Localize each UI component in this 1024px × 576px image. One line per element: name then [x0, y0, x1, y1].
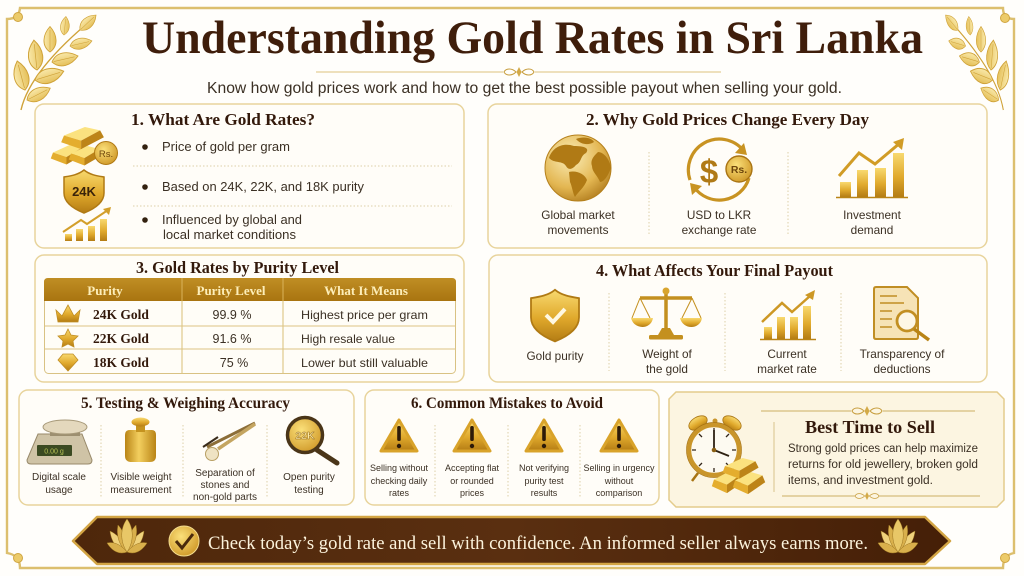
icon: 22K magnifier: 22K: [295, 430, 315, 442]
label: separation: stones and: [201, 480, 249, 491]
table header: Purity Level: [197, 283, 266, 298]
label: separation: Separation of: [195, 468, 255, 479]
banner: [73, 517, 950, 564]
label: exchange rate: exchange rate: [682, 223, 757, 237]
icon: left lotus: [107, 519, 147, 553]
label: open purity: Open purity: [283, 472, 335, 483]
title ornament: [316, 67, 721, 77]
row: 24K: 99.9 %: [213, 308, 251, 322]
label: separation: [193, 468, 257, 503]
icon: balance scale: [631, 288, 702, 340]
label: current rate: [757, 347, 817, 376]
label: mistake 2: or rounded: [450, 476, 494, 486]
label: gold purity: Gold purity: [526, 349, 584, 363]
label: transparency: deductions: [873, 362, 931, 376]
icon: 22K magnifier: [288, 418, 337, 463]
label: visible weight: Visible weight: [111, 472, 172, 483]
icon: left laurel sprig: [10, 11, 100, 110]
table header: [87, 283, 408, 298]
label: exchange rate: [682, 208, 757, 237]
bullet 3: Influenced by global and: [162, 213, 302, 227]
label: investment demand: demand: [851, 223, 893, 237]
icon: warning 1: [381, 420, 417, 451]
icon: digital scale: [27, 420, 92, 464]
row: 18K: [58, 354, 428, 371]
best time text: returns for old jewellery, broken gold: [788, 459, 978, 471]
label: mistake 1: [370, 463, 429, 498]
icon: market chart: [760, 290, 816, 340]
label: investment demand: [843, 208, 902, 237]
label: digital scale: usage: [45, 485, 73, 496]
label: mistake 3: [519, 463, 569, 498]
panel: purity table: [35, 255, 464, 382]
table header: What It Means: [324, 283, 408, 298]
heading 1: 1. What Are Gold Rates?: [131, 110, 315, 129]
panel: testing and weighing: [19, 390, 354, 505]
icon: USD to LKR exchange: $: [700, 153, 718, 190]
icon: gold bars: [712, 458, 765, 494]
best time text: [788, 443, 978, 487]
label: mistake 1: Selling without: [370, 463, 429, 473]
icon: digital scale: 0.00 g: [44, 448, 64, 456]
best time heading: Best Time to Sell: [805, 417, 935, 437]
label: current rate: Current: [767, 347, 807, 361]
label: open purity: testing: [294, 485, 324, 496]
label: transparency: Transparency of: [860, 347, 945, 361]
bullet 1: Price of gold per gram: [162, 140, 290, 154]
icon: gold weight: [125, 418, 156, 462]
icon: alarm clock: [686, 413, 744, 481]
label: mistake 1: checking daily: [371, 476, 428, 486]
label: mistake 4: [583, 463, 655, 498]
heading 2: 2. Why Gold Prices Change Every Day: [586, 110, 870, 129]
bullet 2: Based on 24K, 22K, and 18K purity: [162, 180, 365, 194]
row: 22K: [58, 329, 395, 347]
heading 4: 4. What Affects Your Final Payout: [596, 261, 833, 280]
table: [44, 278, 456, 374]
row: 24K: Highest price per gram: [301, 308, 428, 322]
icon: 24K shield: [64, 170, 104, 213]
ornament bottom: [782, 492, 980, 500]
panel: best time to sell: [669, 392, 1004, 507]
label: mistake 4: Selling in urgency: [583, 463, 655, 473]
subtitle: Know how gold prices work and how to get the best possible payout when selling your gold.: [207, 80, 842, 97]
heading 5: 5. Testing & Weighing Accuracy: [81, 395, 290, 412]
banner text: Check today’s gold rate and sell with confidence. An informed seller always earns more.: [208, 533, 868, 554]
icon: check badge: [169, 526, 199, 556]
icon: investment chart: [836, 138, 908, 198]
row: 22K: 22K Gold: [93, 331, 149, 346]
label: mistake 3: purity test: [524, 476, 564, 486]
label: visible weight: measurement: [110, 485, 172, 496]
row: 22K: High resale value: [301, 332, 395, 346]
label: global market: Global market: [541, 208, 615, 222]
icon: right lotus: [878, 519, 918, 553]
panel: final payout: [489, 255, 987, 382]
panel: common mistakes: [365, 390, 659, 505]
label: mistake 2: prices: [460, 488, 484, 498]
label: mistake 3: results: [531, 488, 558, 498]
label: mistake 2: [445, 463, 500, 498]
icon: warning 2: [454, 420, 490, 451]
heading 3: 3. Gold Rates by Purity Level: [136, 258, 339, 277]
icon: 24K shield: 24K: [72, 184, 97, 199]
icon: gold bars and coin: Rs.: [99, 149, 113, 160]
label: mistake 4: without: [604, 476, 634, 486]
label: weight: Weight of: [642, 347, 693, 361]
label: current rate: market rate: [757, 362, 817, 376]
icon: USD to LKR exchange: Rs.: [731, 164, 747, 176]
bullet 3: local market conditions: [163, 228, 296, 242]
label: mistake 1: rates: [389, 488, 410, 498]
label: investment demand: Investment: [843, 208, 902, 222]
icon: warning 4: [601, 420, 637, 451]
label: exchange rate: USD to LKR: [687, 208, 751, 222]
icon: globe: [545, 135, 611, 201]
panel: why gold prices change: [488, 104, 987, 248]
row: 22K: 91.6 %: [213, 332, 251, 346]
row: 24K: 24K Gold: [93, 307, 149, 322]
label: weight: the gold: [646, 362, 688, 376]
icon: tweezers and stone: [203, 423, 255, 460]
label: transparency: [860, 347, 945, 376]
best time text: Strong gold prices can help maximize: [788, 443, 978, 455]
heading 6: 6. Common Mistakes to Avoid: [411, 395, 603, 412]
icon: warning 3: [526, 420, 562, 451]
label: weight: [642, 347, 693, 376]
label: open purity: [283, 472, 335, 496]
label: mistake 3: Not verifying: [519, 463, 569, 473]
label: digital scale: [32, 472, 86, 496]
row: 24K: [56, 305, 428, 322]
label: digital scale: Digital scale: [32, 472, 86, 483]
row: 18K: Lower but still valuable: [301, 356, 428, 370]
best time text: items, and investment gold.: [788, 475, 933, 487]
label: mistake 4: comparison: [596, 488, 642, 498]
label: global market: [541, 208, 615, 237]
icon: document with magnifier: [874, 287, 929, 340]
bullet 3: [142, 213, 302, 242]
label: mistake 2: Accepting flat: [445, 463, 500, 473]
icon: purity shield: [531, 290, 579, 341]
icon: right laurel sprig: [943, 11, 1012, 110]
label: separation: non-gold parts: [193, 492, 257, 503]
label: visible weight: [110, 472, 172, 496]
icon: USD to LKR exchange: [688, 139, 752, 200]
row: 18K: 18K Gold: [93, 355, 149, 370]
title: Understanding Gold Rates in Sri Lanka: [142, 12, 923, 64]
icon: gold bars and coin: [51, 127, 118, 166]
label: global market: movements: [548, 223, 609, 237]
ornament top: [761, 406, 975, 416]
table header: Purity: [87, 283, 123, 298]
icon: growth chart: [63, 207, 111, 241]
panel: what are gold rates: [35, 104, 464, 248]
row: 18K: 75 %: [220, 356, 248, 370]
